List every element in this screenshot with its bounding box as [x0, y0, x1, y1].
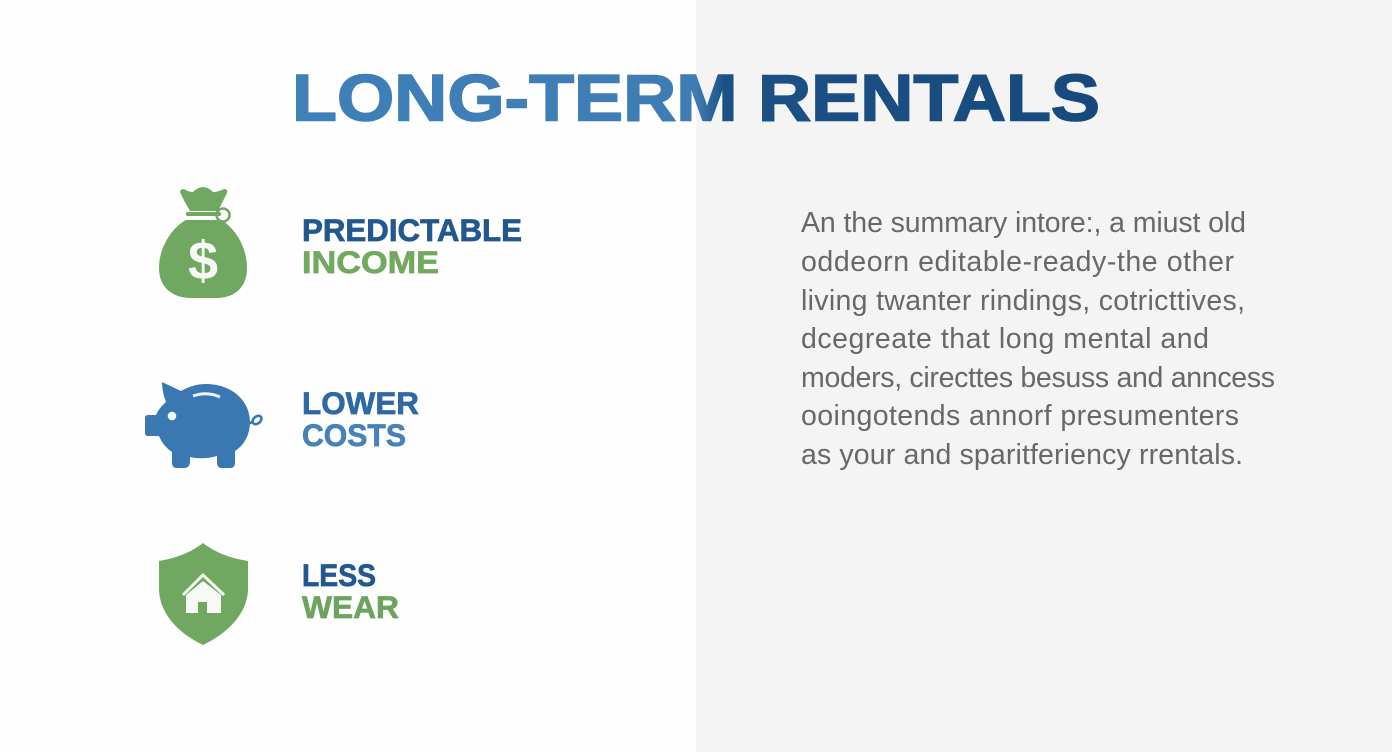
- text block: summary paragraph: oddeorn editable-ready-the other: [801, 246, 1234, 278]
- icon: money bag: [159, 187, 247, 298]
- text block: summary paragraph: ooingotends annorf presumenters: [801, 400, 1239, 432]
- text block: summary paragraph: [801, 207, 1275, 471]
- text block: summary paragraph: moders, cirecttes besuss and anncess: [801, 362, 1275, 394]
- panel: less wear: [159, 543, 399, 645]
- text block: summary paragraph: dcegreate that long mental and: [801, 323, 1209, 355]
- text block: summary paragraph: as your and sparitferiency rrentals.: [801, 439, 1243, 471]
- heading: less wear: WEAR: [302, 589, 399, 625]
- icon: shield with house: [159, 543, 248, 645]
- panel: predictable income: [159, 187, 522, 298]
- text block: summary paragraph: An the summary intore:, a miust old: [801, 207, 1246, 239]
- icon: money bag: $: [188, 231, 218, 291]
- heading: lower costs: [302, 385, 419, 453]
- heading: predictable income: PREDICTABLE: [302, 212, 522, 248]
- icon: piggy bank: [145, 382, 263, 468]
- heading: less wear: [302, 557, 399, 625]
- panel: left background: [0, 0, 696, 752]
- text block: summary paragraph: living twanter rindings, cotricttives,: [801, 285, 1245, 317]
- panel: right background: [696, 0, 1392, 752]
- heading: predictable income: INCOME: [302, 244, 439, 280]
- title: LONG-TERM RENTALS: [292, 62, 1100, 134]
- heading: lower costs: LOWER: [302, 385, 419, 421]
- heading: lower costs: COSTS: [302, 417, 406, 453]
- panel: lower costs: [145, 382, 419, 468]
- heading: predictable income: [302, 212, 522, 280]
- heading: less wear: LESS: [302, 557, 376, 593]
